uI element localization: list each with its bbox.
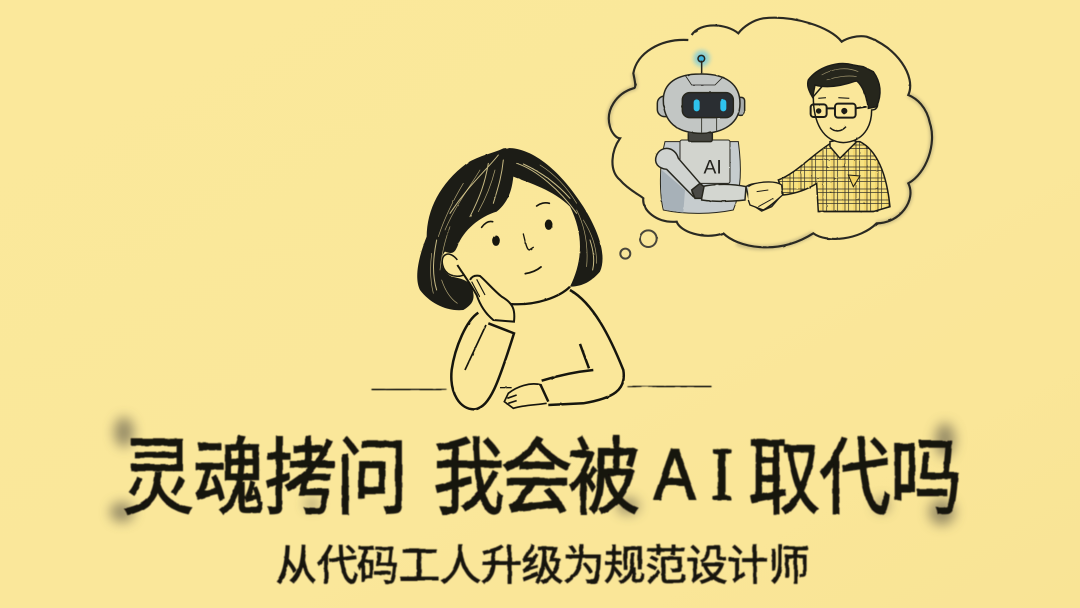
robot <box>656 55 782 213</box>
shirt <box>778 142 890 212</box>
table line right <box>627 386 711 387</box>
subtitle: 从代码工人升级为规范设计师 <box>275 542 810 589</box>
visor <box>682 93 733 118</box>
thought cloud with robot and man <box>609 18 932 248</box>
hair <box>417 148 603 310</box>
eyes <box>694 99 700 111</box>
collar <box>830 138 857 158</box>
title: A <box>654 434 695 515</box>
cloud shading <box>609 73 932 248</box>
left arm sleeve <box>451 313 514 409</box>
title: 我会被 <box>433 431 640 525</box>
robot head <box>663 74 740 133</box>
AI chest label: AI <box>704 157 722 178</box>
robot neck <box>688 132 712 142</box>
man <box>748 64 890 212</box>
face <box>510 287 570 304</box>
hair highlights <box>431 155 597 303</box>
antenna glow <box>694 50 710 66</box>
thought bubbles <box>640 230 657 247</box>
ink smudges behind title <box>110 417 955 525</box>
robot body <box>660 142 740 213</box>
title: I <box>711 433 732 516</box>
hand on cheek <box>457 265 514 322</box>
title: 灵魂拷问 <box>122 431 408 525</box>
cloud outline <box>609 18 932 247</box>
robot ears <box>657 96 673 117</box>
robot hand <box>746 183 782 211</box>
title <box>122 431 962 525</box>
robot arm <box>656 148 700 197</box>
right hand <box>504 384 547 408</box>
shirt pocket <box>848 175 860 187</box>
eyes and brows <box>482 203 552 274</box>
torso and right arm <box>541 290 624 405</box>
man hand <box>748 182 783 210</box>
title: 取代吗 <box>748 431 962 525</box>
man eyes and mouth <box>818 96 849 100</box>
man hair <box>808 64 880 108</box>
antenna <box>699 62 704 73</box>
face <box>813 80 878 143</box>
girl illustration <box>417 148 657 409</box>
glasses <box>811 104 867 118</box>
table line left <box>372 389 447 390</box>
ear <box>442 254 464 276</box>
